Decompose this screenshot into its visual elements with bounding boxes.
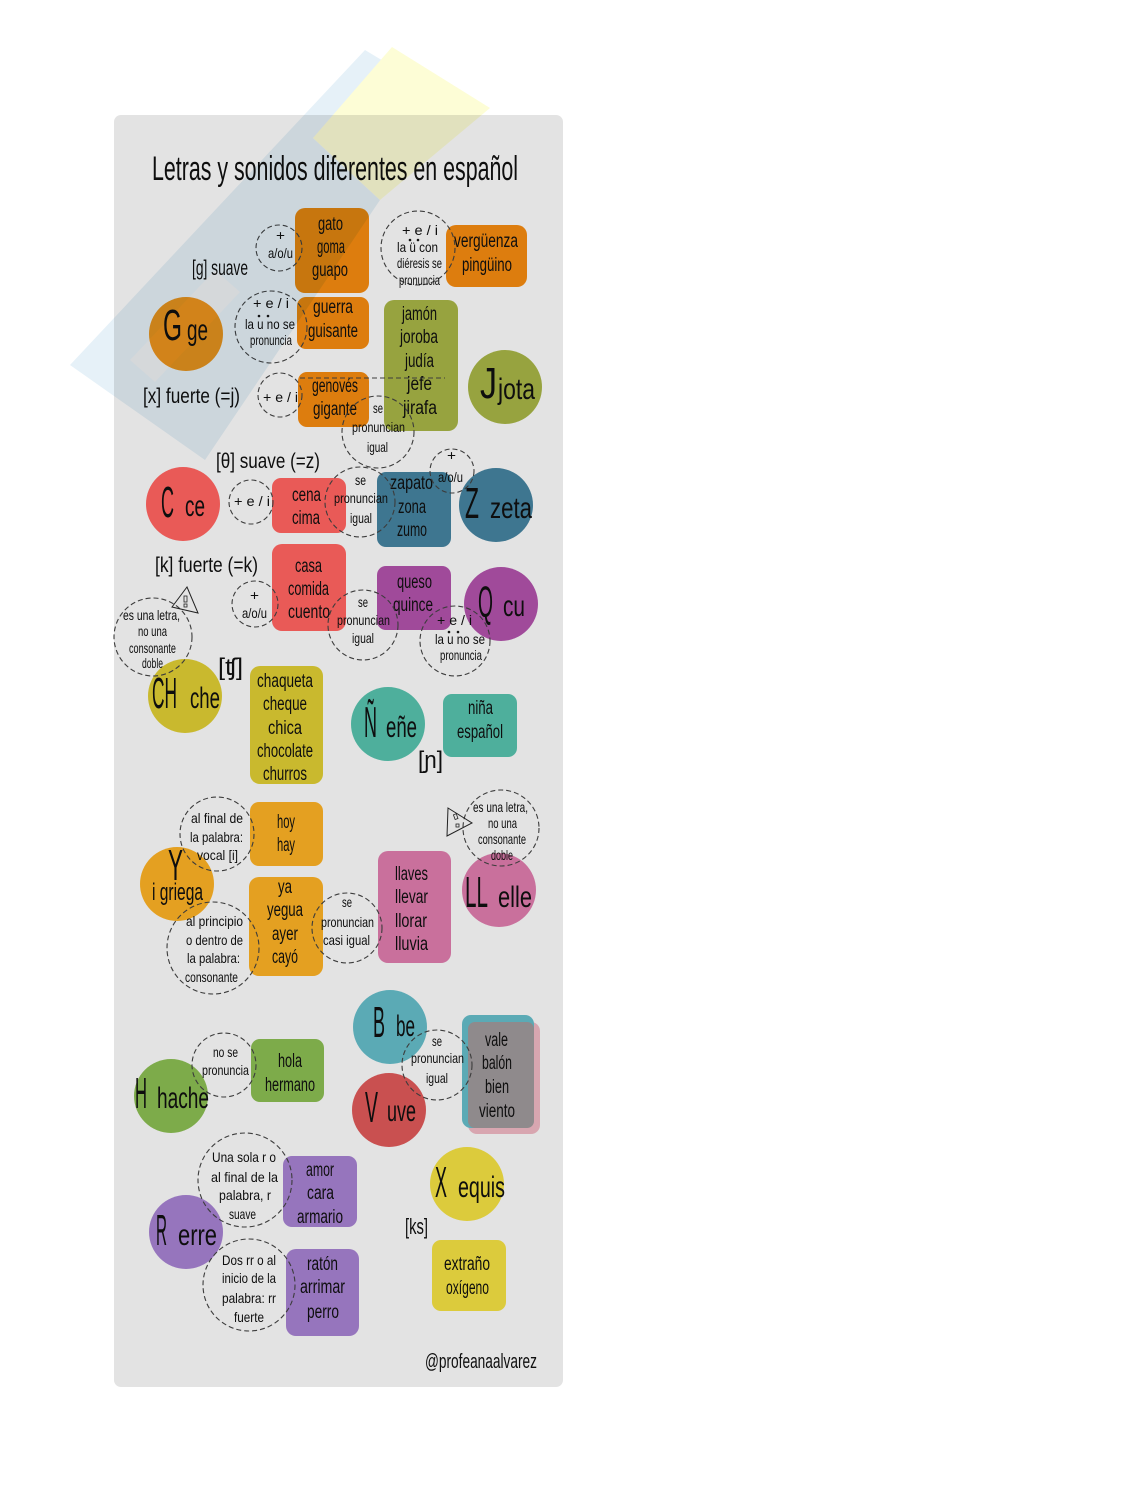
letter B circle: be xyxy=(396,1010,415,1043)
note bubble: se pronuncian igual (b/v): igual xyxy=(426,1070,448,1086)
note bubble: la u no se pronuncia (g): + e / i xyxy=(253,295,289,311)
note bubble: + a/o/u (zeta): a/o/u xyxy=(438,469,463,485)
word box: niña español: niña xyxy=(468,698,493,719)
word box: gato goma guapo: gato xyxy=(318,214,343,235)
note bubble: la u no se pronuncia (g): pronuncia xyxy=(250,332,292,348)
note bubble: diéresis: diéresis se xyxy=(397,255,442,271)
note bubble: al final de la palabra: vocal [i] xyxy=(197,847,238,863)
word box: ratón arrimar perro: ratón xyxy=(307,1254,338,1275)
word box: gato goma guapo xyxy=(295,208,369,293)
word box: ya yegua ayer cayó xyxy=(249,877,323,976)
letter H circle: H xyxy=(135,1069,147,1118)
word box: genovés gigante xyxy=(298,372,369,427)
note bubble: la u no se pronuncia (q): pronuncia xyxy=(440,647,482,663)
note bubble: es una letra (ll): doble xyxy=(491,847,513,863)
word box: jamón joroba judía jefe jirafa: jefe xyxy=(406,374,432,395)
word box: cena cima: cima xyxy=(292,508,320,529)
letter B circle xyxy=(353,990,427,1064)
letter J circle: jota xyxy=(497,373,535,406)
word box: che words: cheque xyxy=(263,694,307,715)
letter V circle: V xyxy=(365,1083,378,1132)
word box: vergüenza pingüino: pingüino xyxy=(462,255,512,276)
word box: jamón joroba judía jefe jirafa xyxy=(384,300,458,431)
note bubble: se pronuncian igual (g/j): igual xyxy=(367,439,388,455)
word box: ratón arrimar perro xyxy=(286,1249,359,1336)
letter C circle: C xyxy=(161,478,174,527)
note bubble: se pronuncian igual (c/z): pronuncian xyxy=(334,490,388,506)
letter Q circle: Q xyxy=(478,578,493,627)
word box: llaves llevar llorar lluvia xyxy=(378,851,451,963)
note bubble: una sola r: palabra, r xyxy=(219,1187,271,1203)
word box: jamón joroba judía jefe jirafa: jirafa xyxy=(402,398,437,419)
letter X circle: equis xyxy=(458,1171,505,1204)
letter V circle xyxy=(352,1073,426,1147)
note bubble: se pronuncian igual (b/v): se xyxy=(432,1033,442,1049)
note bubble: al final de la palabra xyxy=(180,797,254,871)
word box: gato goma guapo: goma xyxy=(317,237,345,258)
note bubble: es una letra (ll): no una xyxy=(488,815,517,831)
word box: zapato zona zumo: zapato xyxy=(390,473,433,494)
note bubble: al principio o dentro: consonante xyxy=(185,969,238,985)
word box: vergüenza pingüino: vergüenza xyxy=(454,231,518,252)
note bubble: se pronuncian igual (g/j): se xyxy=(373,400,383,416)
word box: guerra guisante: guisante xyxy=(308,321,358,342)
sound label: eñe: [ɲ] xyxy=(418,747,443,774)
title: Letras y sonidos diferentes en español xyxy=(152,150,518,188)
word box: amor cara armario: amor xyxy=(306,1160,334,1181)
note bubble: no se pronuncia: pronuncia xyxy=(202,1062,249,1078)
letter B circle: B xyxy=(373,998,385,1047)
icon: warning triangle (ch) xyxy=(172,587,198,613)
credit: @profeanaalvarez xyxy=(425,1351,537,1373)
word box: niña español: español xyxy=(457,722,503,743)
letter Y circle xyxy=(140,841,214,921)
letter Q circle: cu xyxy=(503,590,525,623)
note bubble: al principio o dentro: al principio xyxy=(186,913,243,929)
word box: llaves llevar llorar lluvia: lluvia xyxy=(395,934,428,955)
letter J circle: J xyxy=(480,359,497,408)
note bubble: + a/o/u (casa) xyxy=(232,581,278,627)
word box: extraño oxígeno xyxy=(432,1240,506,1311)
note bubble: la u no se pronuncia (q): + e / i xyxy=(437,612,472,628)
word box: che words: chocolate xyxy=(257,741,313,762)
note bubble: no se pronuncia xyxy=(192,1033,256,1097)
word box: ya yegua ayer cayó: cayó xyxy=(272,947,298,968)
word box: zapato zona zumo xyxy=(377,472,451,547)
word box: ratón arrimar perro: perro xyxy=(307,1302,339,1323)
note bubble: la u no se pronuncia (g): la u no se xyxy=(245,316,295,332)
note bubble: se pronuncian igual (c/q): igual xyxy=(352,630,374,646)
letter G circle: G xyxy=(163,301,182,350)
word box: guerra guisante: guerra xyxy=(313,297,353,318)
note bubble: se pronuncian igual (c/q) xyxy=(328,590,398,660)
word box: queso quince: queso xyxy=(397,572,432,593)
word box: hoy hay: hoy xyxy=(277,812,295,833)
letter LL circle: elle xyxy=(498,881,532,914)
word box: queso quince: quince xyxy=(393,595,433,616)
note bubble: es una letra (ch): consonante xyxy=(129,640,176,656)
word box: vale balón bien viento: balón xyxy=(482,1053,512,1074)
note bubble: se pronuncian casi igual xyxy=(312,893,382,963)
note bubble: al final de la palabra: la palabra: xyxy=(190,829,243,845)
word box: hola hermano xyxy=(251,1039,324,1102)
note bubble: es una letra (ch): doble xyxy=(142,655,163,671)
watermark xyxy=(70,47,490,460)
note bubble: al final de la palabra: al final de xyxy=(191,810,243,826)
note bubble: + e/i (genovés) xyxy=(258,373,302,417)
word box: casa comida cuento xyxy=(272,544,346,631)
word box: ya yegua ayer cayó: ayer xyxy=(272,924,298,945)
letter Y circle: Y xyxy=(168,841,183,890)
note bubble: se pronuncian igual (c/z): igual xyxy=(350,510,372,526)
note bubble: al principio o dentro xyxy=(167,902,259,994)
word box: llaves llevar llorar lluvia: llorar xyxy=(395,911,428,932)
note bubble: al principio o dentro: o dentro de xyxy=(186,932,243,948)
note bubble: + a/o/u (gato): a/o/u xyxy=(268,245,293,261)
letter X circle xyxy=(430,1147,505,1221)
letter Ñ circle xyxy=(351,687,425,761)
note bubble: dos rr: palabra: rr xyxy=(222,1290,276,1306)
note bubble: dos rr: fuerte xyxy=(234,1309,264,1325)
letter G circle xyxy=(149,297,223,371)
word box: jamón joroba judía jefe jirafa: judía xyxy=(404,351,434,372)
note bubble: se pronuncian igual (g/j) xyxy=(342,396,414,468)
word box: ya yegua ayer cayó: yegua xyxy=(267,900,303,921)
note bubble: se pronuncian igual (g/j): pronuncian xyxy=(352,419,405,435)
letter H circle: hache xyxy=(157,1082,209,1115)
note bubble: no se pronuncia: no se xyxy=(213,1044,238,1060)
word box: extraño oxígeno: oxígeno xyxy=(446,1278,489,1299)
word box: ratón arrimar perro: arrimar xyxy=(300,1277,345,1298)
note bubble: la u no se pronuncia (g) xyxy=(235,291,307,363)
word box: llaves llevar llorar lluvia: llaves xyxy=(395,864,428,885)
word box: vale balón bien viento xyxy=(462,1015,540,1134)
note bubble: una sola r: al final de la xyxy=(211,1169,278,1185)
letter V circle: uve xyxy=(387,1095,416,1128)
word box: hoy hay xyxy=(250,802,323,866)
letter C circle: ce xyxy=(185,490,205,523)
letter C circle xyxy=(146,467,220,541)
word box: genovés gigante: gigante xyxy=(313,399,357,420)
letter X circle: X xyxy=(435,1158,447,1207)
note bubble: es una letra (ch): es una letra, xyxy=(123,607,180,623)
note bubble: se pronuncian igual (b/v) xyxy=(402,1030,472,1100)
note bubble: + e/i (genovés): + e / i xyxy=(263,389,298,405)
note bubble: una sola r: Una sola r o xyxy=(212,1149,276,1165)
note bubble: + a/o/u (casa): a/o/u xyxy=(242,605,267,621)
word box: che words: chica xyxy=(268,718,302,739)
word box: genovés gigante: genovés xyxy=(312,376,358,397)
letter H circle xyxy=(134,1059,209,1133)
note bubble: es una letra (ll): consonante xyxy=(478,831,526,847)
note bubble: dos rr: inicio de la xyxy=(222,1270,276,1286)
note bubble: se pronuncian casi igual: casi igual xyxy=(323,932,370,948)
note bubble: al principio o dentro: la palabra: xyxy=(187,950,240,966)
note bubble: diéresis xyxy=(381,211,455,288)
icon: warning triangle (ll) xyxy=(447,808,472,836)
note bubble: se pronuncian igual (c/z): se xyxy=(355,472,366,488)
note bubble: diéresis: pronuncia xyxy=(399,272,440,288)
letter CH circle xyxy=(148,659,222,733)
word box: zapato zona zumo: zona xyxy=(398,497,426,518)
word box: che words: churros xyxy=(263,764,307,785)
word box: llaves llevar llorar lluvia: llevar xyxy=(395,887,428,908)
word box: che words: chaqueta xyxy=(257,671,313,692)
note bubble: se pronuncian igual (b/v): pronuncian xyxy=(411,1050,464,1066)
note bubble: es una letra (ll): es una letra, xyxy=(473,799,528,815)
letter Y circle: i griega xyxy=(152,879,203,906)
word box: vale balón bien viento: bien xyxy=(485,1077,509,1098)
word box: cena cima: cena xyxy=(292,485,321,506)
letter CH circle: che xyxy=(190,682,220,715)
letter Q circle xyxy=(464,567,538,641)
note bubble: la u no se pronuncia (q): la u no se xyxy=(435,631,485,647)
note bubble: + a/o/u (zeta) xyxy=(430,447,474,493)
word box: vale balón bien viento: vale xyxy=(485,1030,508,1051)
word box: amor cara armario xyxy=(283,1156,357,1228)
word box: amor cara armario: armario xyxy=(297,1207,343,1228)
note bubble: + a/o/u (gato): + xyxy=(276,227,285,243)
letter LL circle xyxy=(462,853,536,927)
word box: queso quince xyxy=(377,566,451,630)
word box: amor cara armario: cara xyxy=(307,1183,334,1204)
panel: background card xyxy=(114,115,563,1387)
letter R circle xyxy=(149,1195,223,1269)
note bubble: es una letra (ch) xyxy=(114,598,192,676)
word box: gato goma guapo: guapo xyxy=(312,260,348,281)
note bubble: diéresis: + e / i xyxy=(402,222,438,238)
note bubble: una sola r xyxy=(198,1133,292,1227)
letter Z circle xyxy=(459,468,533,542)
letter Z circle: Z xyxy=(465,479,479,528)
note bubble: es una letra (ch): no una xyxy=(138,623,167,639)
note bubble: diéresis: la ü con xyxy=(397,239,438,255)
sound label: [ks]: [ks] xyxy=(405,1214,428,1239)
note bubble: dos rr xyxy=(203,1239,295,1331)
word box: hoy hay: hay xyxy=(277,835,295,856)
note bubble: se pronuncian casi igual: se xyxy=(342,894,352,910)
letter R circle: R xyxy=(156,1206,167,1255)
word box: casa comida cuento: comida xyxy=(288,579,329,600)
word box: casa comida cuento: cuento xyxy=(288,602,330,623)
note bubble: + e/i (ce): + e / i xyxy=(234,493,270,509)
note bubble: se pronuncian igual (c/q): pronuncian xyxy=(337,612,390,628)
letter CH circle: CH xyxy=(152,669,177,718)
note bubble: + a/o/u (casa): + xyxy=(250,587,259,603)
note bubble: es una letra (ll) xyxy=(463,790,539,866)
word box: extraño oxígeno: extraño xyxy=(444,1254,490,1275)
word box: niña español xyxy=(443,694,517,757)
word box: jamón joroba judía jefe jirafa: joroba xyxy=(399,327,438,348)
note bubble: se pronuncian igual (c/q): se xyxy=(358,594,368,610)
sound label: [k] fuerte: [k] fuerte (=k) xyxy=(155,554,258,577)
word box: vergüenza pingüino xyxy=(446,225,527,287)
sound label: che: [ʧ] xyxy=(218,654,243,681)
letter Z circle: zeta xyxy=(490,492,532,525)
note bubble: dos rr: Dos rr o al xyxy=(222,1252,276,1268)
word box: casa comida cuento: casa xyxy=(295,556,322,577)
note bubble: la u no se pronuncia (q) xyxy=(420,606,490,676)
word box: ya yegua ayer cayó: ya xyxy=(278,877,292,898)
note bubble: se pronuncian casi igual: pronuncian xyxy=(321,914,374,930)
sound label: theta suave: [θ] suave (=z) xyxy=(216,450,320,473)
note bubble: + e/i (ce) xyxy=(229,480,273,524)
word box: guerra guisante xyxy=(297,297,369,349)
letter G circle: ge xyxy=(187,314,208,347)
word box: vale balón bien viento: viento xyxy=(479,1101,515,1122)
letter R circle: erre xyxy=(178,1219,217,1252)
word box: zapato zona zumo: zumo xyxy=(397,520,427,541)
note bubble: + a/o/u (zeta): + xyxy=(447,447,456,463)
note bubble: una sola r: suave xyxy=(229,1206,256,1222)
word box: hola hermano: hermano xyxy=(265,1075,315,1096)
word box: jamón joroba judía jefe jirafa: jamón xyxy=(401,304,437,325)
sound label: [x] fuerte: [x] fuerte (=j) xyxy=(143,385,240,408)
note bubble: + a/o/u (gato) xyxy=(256,225,302,271)
letter J circle xyxy=(468,350,542,424)
word box: hola hermano: hola xyxy=(278,1051,302,1072)
letter Ñ circle: Ñ xyxy=(364,697,377,747)
letter Ñ circle: eñe xyxy=(386,711,417,744)
letter LL circle: LL xyxy=(465,868,488,917)
sound label: [g] suave: [g] suave xyxy=(192,257,248,280)
word box: cena cima xyxy=(272,478,346,533)
word box: che words xyxy=(250,666,323,785)
note bubble: se pronuncian igual (c/z) xyxy=(325,467,395,537)
